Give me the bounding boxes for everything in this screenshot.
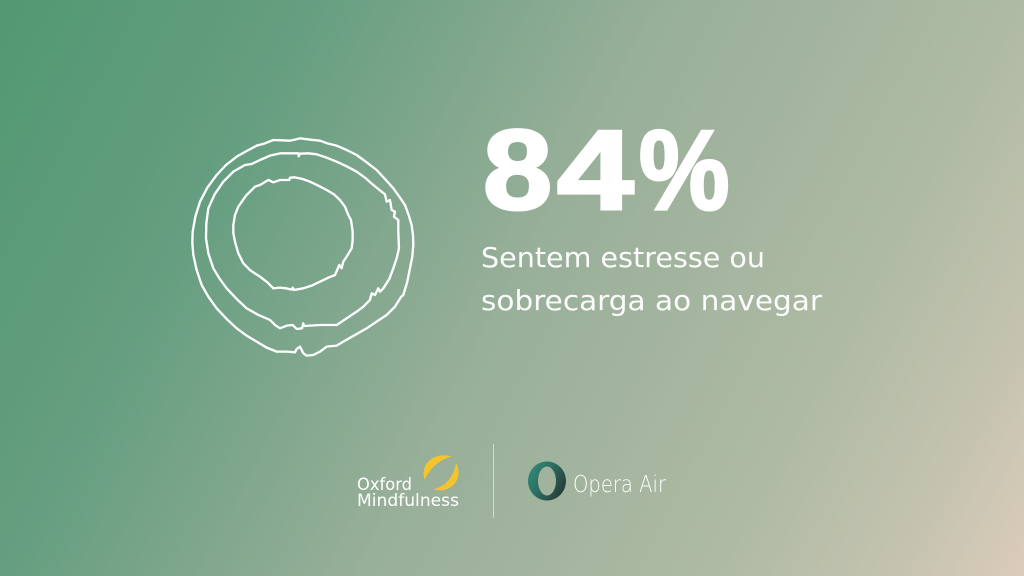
line 2: sobrecarga ao navegar (481, 284, 823, 317)
stat: 84%: 8 (483, 107, 552, 234)
outer ring (192, 138, 413, 356)
inner ring (233, 177, 353, 290)
logo: Oxford Mindfulness (357, 455, 459, 511)
icon: concentric wavy rings (192, 138, 413, 356)
middle ring (206, 153, 399, 329)
wordmark: Oxford (357, 475, 412, 495)
wordmark (357, 475, 459, 511)
wordmark: Opera Air (573, 472, 666, 498)
line 1: Sentem estresse ou (481, 241, 765, 274)
stat: 84% (483, 107, 729, 234)
icon: yellow crescents (424, 455, 459, 490)
icon: Opera O (528, 462, 566, 500)
wordmark: Mindfulness (357, 491, 459, 511)
logo: Opera Air (528, 462, 666, 500)
description text (481, 241, 823, 317)
stat: 84%: 4 (557, 107, 634, 233)
stat: 84%: % (639, 107, 729, 233)
divider (493, 444, 494, 518)
